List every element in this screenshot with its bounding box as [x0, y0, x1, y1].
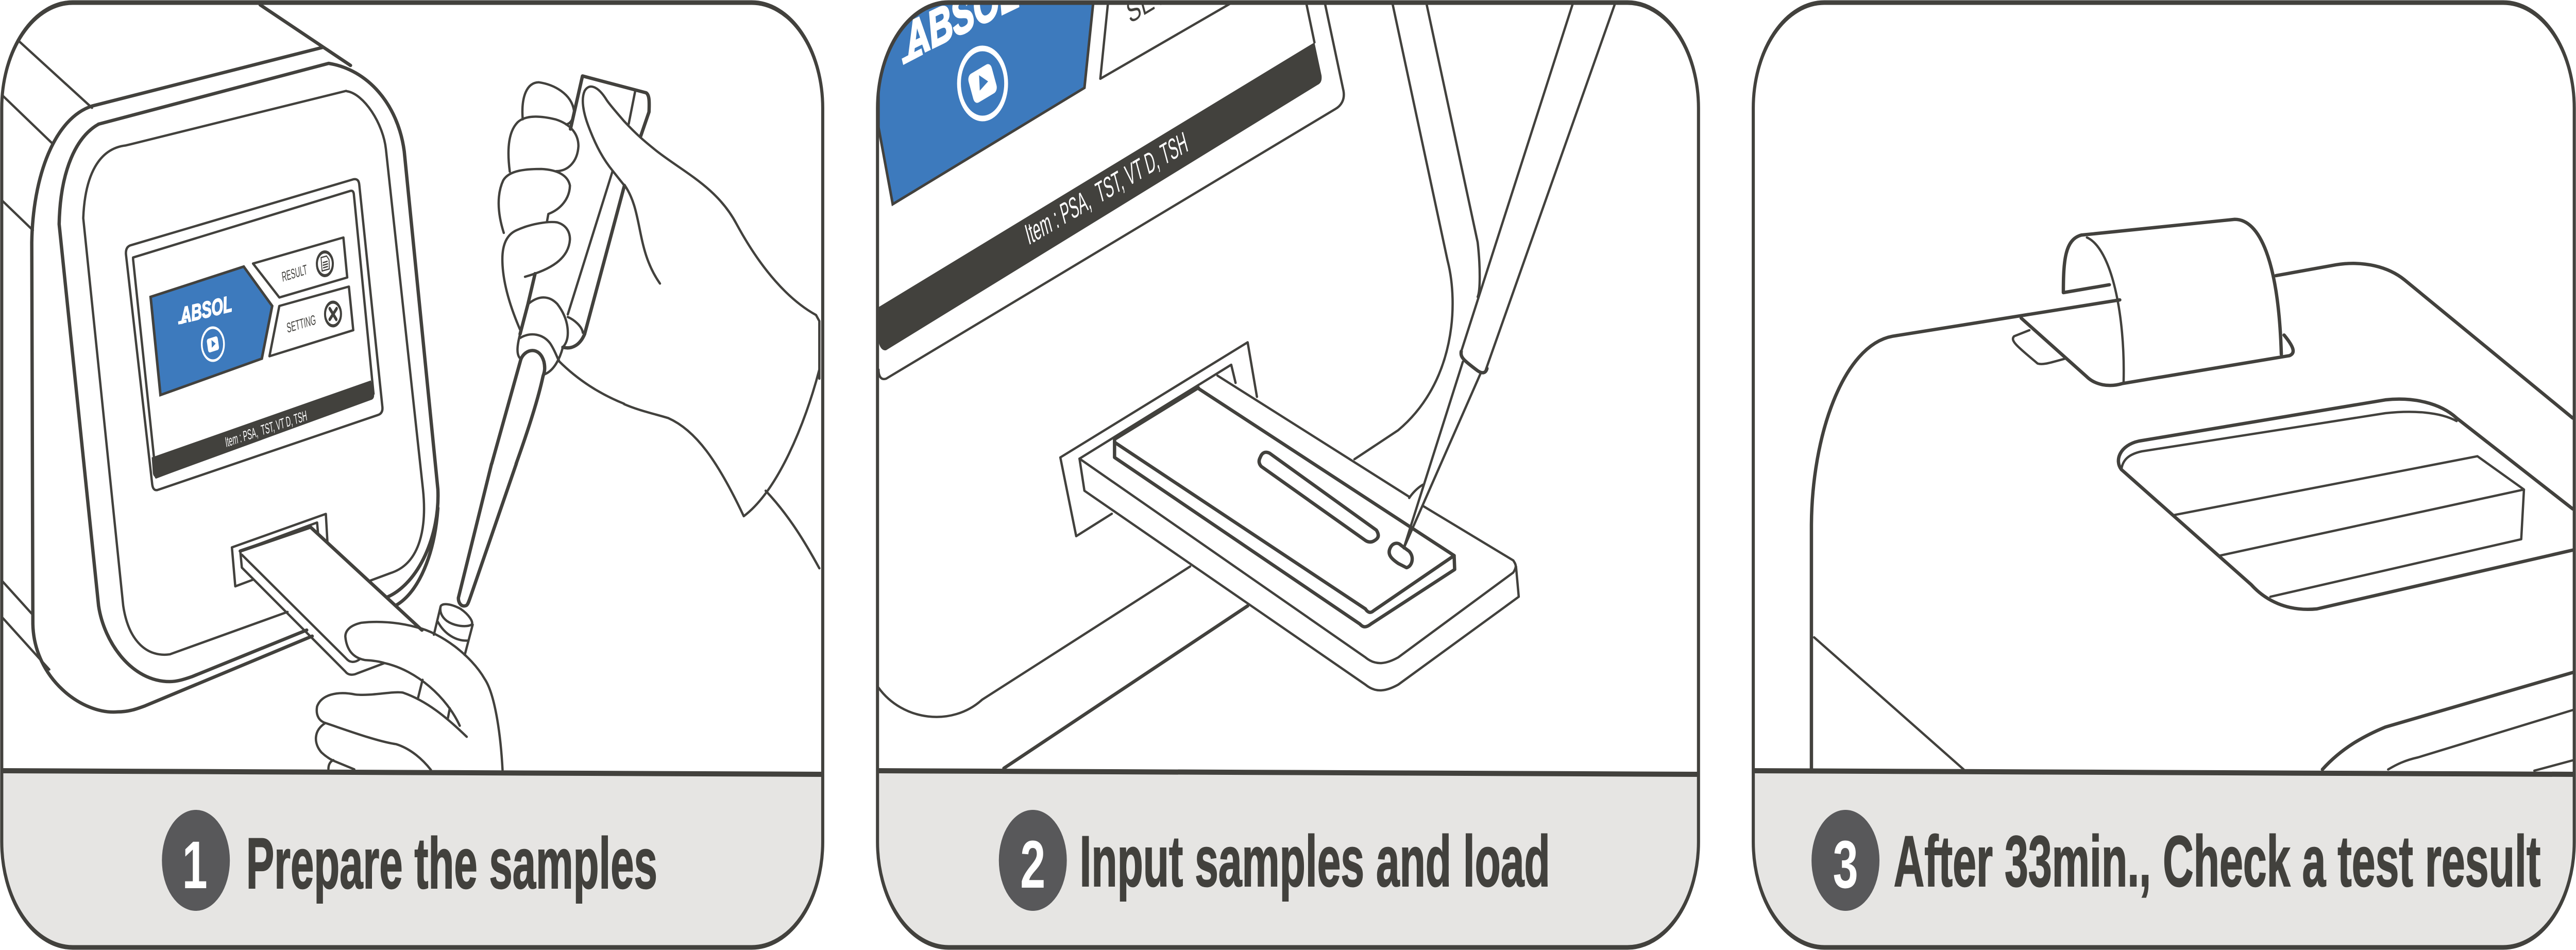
number badge 2: 2 [1020, 826, 1045, 902]
number badge 2 [999, 810, 1067, 911]
lower gloved hand [316, 622, 502, 770]
screen label: ABSOL logo: ABSOL [179, 291, 233, 328]
cartridge tray [1079, 376, 1519, 690]
screen footer text: Item : PSA, TST, VT D, TSH [224, 408, 308, 451]
test strip [1114, 388, 1454, 627]
upper hand back and cuff [624, 121, 819, 568]
number badge 1: 1 [182, 827, 208, 903]
blue start button [150, 266, 272, 395]
setting button close-up [1100, 3, 1231, 79]
pipette and upper fingers [492, 76, 649, 464]
icon: play button [202, 328, 224, 361]
panel frame [1753, 3, 2574, 947]
icon: document [317, 252, 333, 276]
test cartridge [240, 527, 422, 675]
illustration: screen close-up, cartridge and pipette [878, 0, 1615, 768]
caption text: Input samples and load [1080, 821, 1550, 902]
pipette tip [1404, 5, 1615, 548]
sample well [1389, 544, 1412, 568]
result window [1259, 452, 1378, 542]
cartridge, tube and lower hand [232, 464, 516, 770]
button label: setting: SETTING [286, 312, 317, 336]
icon: play button close-up [959, 48, 1006, 118]
pipette tip end [459, 464, 516, 606]
sample tube [418, 604, 473, 718]
illustration: analyzer, pipette and hands [3, 5, 819, 770]
panel frame [877, 3, 1699, 947]
button label: result: RESULT [281, 262, 308, 285]
touch screen frame [126, 179, 382, 490]
gripping fingers [499, 82, 624, 404]
panel frame [2, 3, 823, 947]
analyzer bezel [878, 5, 1480, 768]
panel: step 3 check a test result [1753, 3, 2574, 947]
caption bar step 1 [2, 771, 823, 947]
analyzer body left and top [3, 5, 350, 712]
panel: step 2 input samples and load [877, 0, 1699, 947]
test strip slot [232, 514, 328, 586]
printed paper [2063, 219, 2281, 382]
number badge 3 [1811, 810, 1879, 911]
cartridge in tray [2175, 456, 2524, 597]
pipette tip upper [492, 350, 545, 464]
front lower edges [2323, 672, 2573, 771]
result button [253, 237, 347, 297]
screen footer text close-up: Item : PSA, TST, VT D, TSH [1022, 126, 1191, 251]
icon: tools [325, 302, 341, 326]
analyzer top outline [1811, 263, 2573, 771]
pipette barrel [520, 76, 649, 334]
caption bar step 2 [877, 771, 1699, 947]
illustration: printer output on analyzer top [1811, 219, 2573, 771]
analyzer bezel right side [98, 63, 438, 605]
test strip slot [1060, 342, 1257, 536]
screen frame close-up [878, 3, 1344, 379]
pipette collars [517, 297, 585, 375]
paper outlet [2013, 318, 2293, 385]
number badge 3: 3 [1833, 826, 1858, 902]
number badge 1 [162, 810, 230, 911]
caption text: Prepare the samples [246, 823, 657, 904]
setting button [269, 286, 353, 356]
panel: step 1 prepare the samples [2, 3, 823, 947]
cartridge door [2119, 399, 2573, 609]
caption bar step 3 [1753, 771, 2574, 947]
blue start button close-up [878, 3, 1093, 204]
